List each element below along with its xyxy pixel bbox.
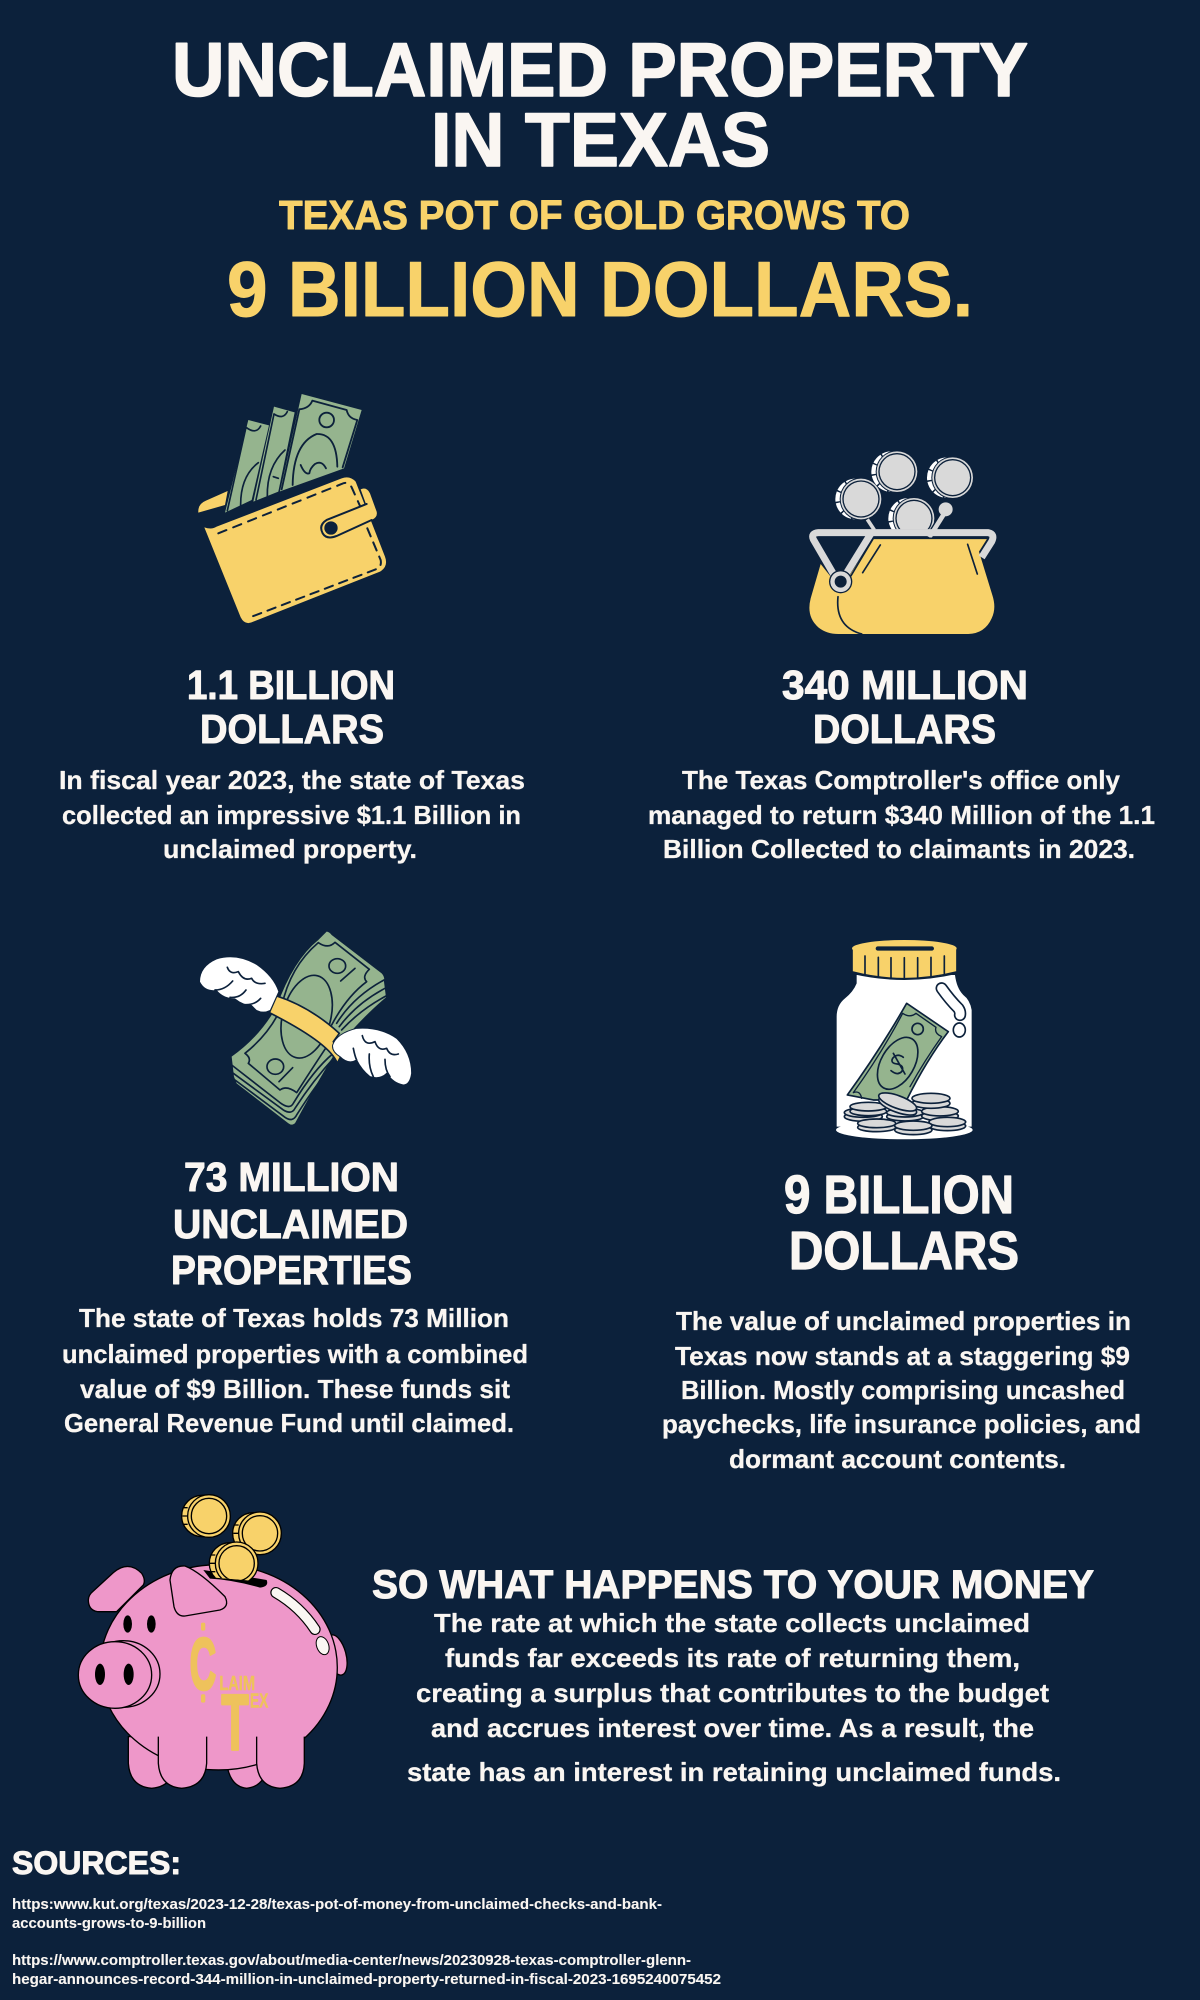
title: IN TEXAS: [431, 98, 770, 183]
sources list: accounts-grows-to-9-billion: [12, 1916, 206, 1932]
heading: 9 BILLION: [784, 1165, 1014, 1225]
body text: state has an interest in retaining unclaimed funds.: [407, 1757, 1061, 1787]
heading line 2: DOLLARS: [789, 1221, 1019, 1281]
body text: paychecks, life insurance policies, and: [662, 1409, 1141, 1439]
sources list: https://www.comptroller.texas.gov/about/media-center/news/20230928-texas-comptroller-glenn-: [12, 1953, 691, 1969]
body text: The rate at which the state collects unclaimed: [434, 1608, 1030, 1638]
panel: collected: [59, 394, 525, 864]
sources heading: SOURCES:: [12, 1845, 181, 1881]
body text: Texas now stands at a staggering $9: [675, 1341, 1130, 1371]
panel: unclaimed properties: [62, 932, 528, 1438]
panel: returned: [648, 450, 1155, 864]
body text: Billion. Mostly comprising uncashed: [681, 1375, 1125, 1405]
icon: piggy bank with logo: LAIM: [219, 1672, 255, 1695]
sources list: hegar-announces-record-344-million-in-unclaimed-property-returned-in-fiscal-2023-1695240075452: [12, 1972, 721, 1988]
body text: [407, 1608, 1061, 1787]
heading line 2: DOLLARS: [200, 706, 384, 752]
body text: [59, 765, 525, 864]
title: [172, 28, 1028, 183]
body text: [662, 1306, 1141, 1474]
body text: dormant account contents.: [729, 1444, 1066, 1474]
body text: In fiscal year 2023, the state of Texas: [59, 765, 525, 795]
heading: 1.1 BILLION: [187, 662, 395, 708]
icon: money with wings: [200, 932, 412, 1125]
body text: The state of Texas holds 73 Million: [79, 1303, 509, 1333]
heading line 2: UNCLAIMED: [173, 1201, 408, 1247]
icon: coin purse: [809, 450, 994, 634]
icon: piggy bank with logo: C: [190, 1624, 216, 1706]
body text: The value of unclaimed properties in: [676, 1306, 1131, 1336]
panel: what happens: [78, 1495, 1094, 1788]
title: UNCLAIMED PROPERTY: [172, 28, 1028, 113]
body text: Billion Collected to claimants in 2023.: [663, 834, 1135, 864]
subtitle: TEXAS POT OF GOLD GROWS TO: [279, 192, 910, 238]
sources list: https:www.kut.org/texas/2023-12-28/texas-pot-of-money-from-unclaimed-checks-and-bank-: [12, 1897, 662, 1913]
body text: creating a surplus that contributes to the budget: [416, 1678, 1049, 1708]
body text: unclaimed property.: [163, 834, 417, 864]
body text: unclaimed properties with a combined: [62, 1339, 528, 1369]
heading: SO WHAT HAPPENS TO YOUR MONEY: [372, 1563, 1094, 1607]
body text: managed to return $340 Million of the 1.1: [648, 800, 1155, 830]
body text: and accrues interest over time. As a result, the: [431, 1713, 1034, 1743]
body text: collected an impressive $1.1 Billion in: [62, 800, 521, 830]
body text: [648, 765, 1155, 864]
icon: piggy bank with logo: EX: [250, 1691, 269, 1713]
headline figure: 9 BILLION DOLLARS.: [227, 245, 973, 333]
body text: [62, 1303, 528, 1438]
heading line 2: DOLLARS: [813, 706, 996, 752]
icon: savings jar: [836, 940, 973, 1139]
body text: General Revenue Fund until claimed.: [64, 1408, 514, 1438]
panel: total value: [662, 940, 1141, 1474]
body text: value of $9 Billion. These funds sit: [80, 1374, 510, 1404]
heading: 73 MILLION: [184, 1154, 399, 1200]
icon: piggy bank with logo: [78, 1495, 351, 1788]
body text: The Texas Comptroller's office only: [682, 765, 1121, 795]
heading line 3: PROPERTIES: [171, 1247, 412, 1293]
heading: 340 MILLION: [782, 662, 1028, 708]
icon: wallet with cash: [198, 394, 386, 623]
icon: piggy bank with logo: T: [221, 1678, 249, 1766]
body text: funds far exceeds its rate of returning them,: [445, 1643, 1020, 1673]
sources list: [12, 1897, 721, 1988]
